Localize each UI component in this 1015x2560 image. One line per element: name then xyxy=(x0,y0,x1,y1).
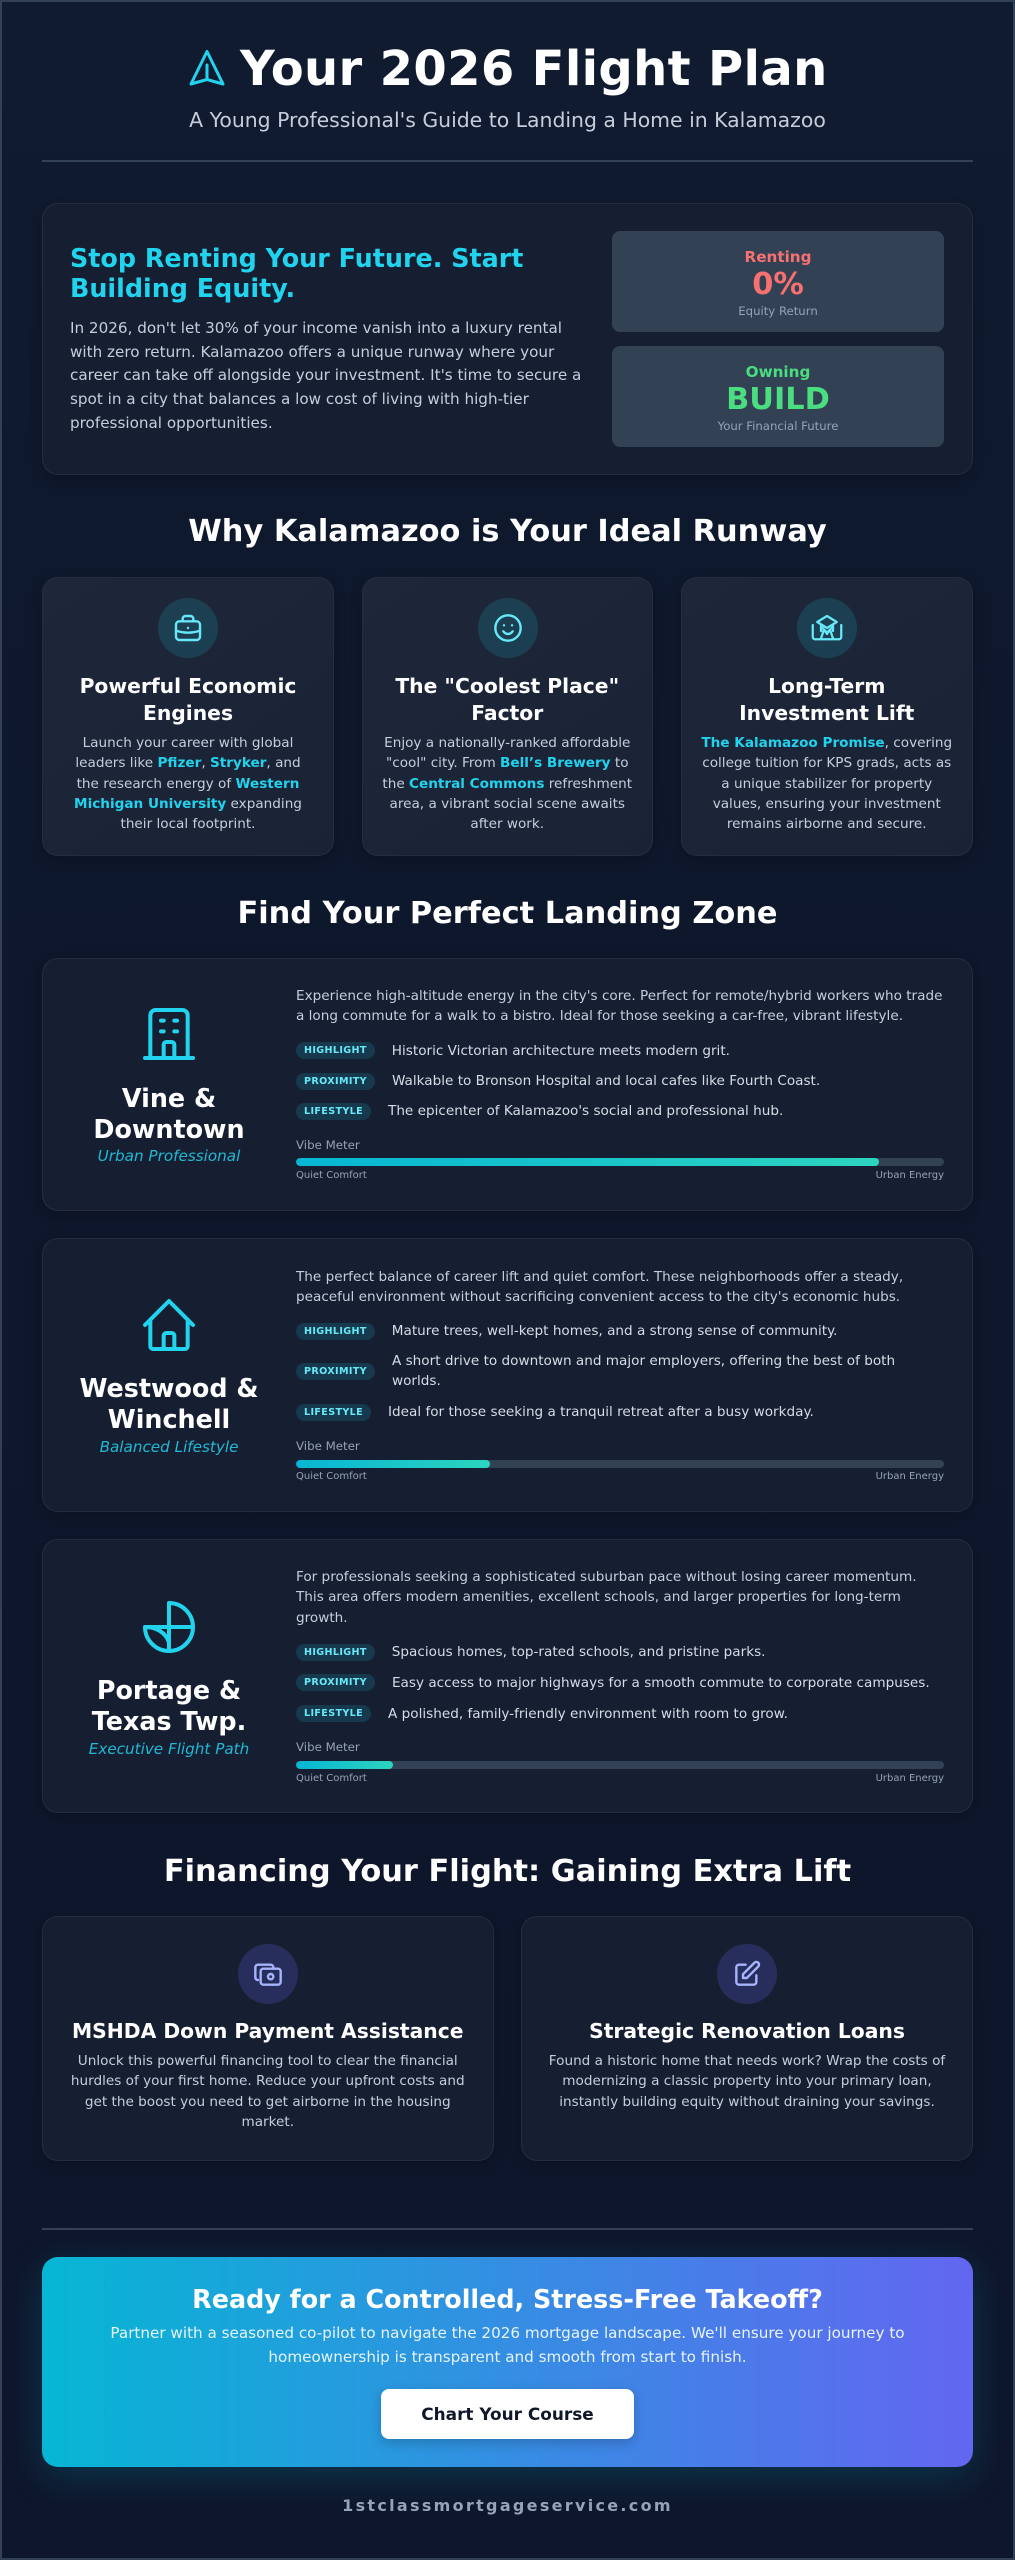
hero heading xyxy=(70,243,523,303)
highlight row: Spacious homes, top-rated schools, and pristine parks. xyxy=(392,1644,766,1660)
panel: portage and texas twp xyxy=(42,1539,973,1813)
stat: owning xyxy=(612,346,944,447)
vibe label: Vibe Meter xyxy=(296,1138,360,1152)
card text: a unique stabilizer for property xyxy=(721,776,932,792)
neighborhood name: Texas Twp. xyxy=(92,1706,246,1736)
hero paragraph xyxy=(70,319,581,432)
lifestyle row: The epicenter of Kalamazoo's social and professional hub. xyxy=(388,1103,783,1119)
card text: Enjoy a nationally-ranked affordable xyxy=(384,735,630,751)
scale labels: Urban Energy xyxy=(876,1170,944,1181)
description: Experience high-altitude energy in the city's core. Perfect for remote/hybrid workers who trade xyxy=(296,988,942,1004)
cta text: Partner with a seasoned co-pilot to navigate the 2026 mortgage landscape. We'll ensure your journey to xyxy=(110,2324,905,2342)
cta heading: Ready for a Controlled, Stress-Free Takeoff? xyxy=(192,2284,823,2314)
heading: financing: Financing Your Flight: Gaining Extra Lift xyxy=(164,1854,851,1889)
card title: Factor xyxy=(471,701,543,725)
heading: why kalamazoo: Why Kalamazoo is Your Ideal Runway xyxy=(188,514,827,549)
card title xyxy=(80,674,296,725)
neighborhood name xyxy=(79,1373,259,1434)
header xyxy=(189,41,828,132)
hero heading: Building Equity. xyxy=(70,273,295,303)
card text: Unlock this powerful financing tool to clear the financial xyxy=(78,2053,458,2069)
card title: Engines xyxy=(143,701,233,725)
card text: area, a vibrant social scene awaits xyxy=(389,796,625,812)
neighborhood name: Vine & xyxy=(122,1083,216,1113)
panel: coolest place xyxy=(362,577,653,856)
hero paragraph: In 2026, don't let 30% of your income vanish into a luxury rental xyxy=(70,319,562,337)
footer url: 1stclassmortgageservice.com xyxy=(342,2496,673,2515)
scale labels: Urban Energy xyxy=(876,1773,944,1784)
lifestyle row: LIFESTYLE xyxy=(304,1708,363,1719)
persona: Executive Flight Path xyxy=(89,1740,249,1758)
description: a long commute for a walk to a bistro. Ideal for those seeking a car-free, vibrant lifestyle. xyxy=(296,1008,903,1024)
card text: instantly building equity without draining your savings. xyxy=(559,2094,935,2110)
scale labels xyxy=(296,1773,944,1784)
card text: market. xyxy=(241,2114,294,2130)
neighborhood name xyxy=(92,1675,246,1736)
highlight row: HIGHLIGHT xyxy=(304,1045,367,1056)
vibe meter bar xyxy=(296,1158,944,1166)
scale labels xyxy=(296,1471,944,1482)
neighborhood name: Downtown xyxy=(93,1114,245,1144)
description xyxy=(296,1569,917,1626)
proximity row: A short drive to downtown and major employers, offering the best of both xyxy=(392,1353,895,1369)
icon: office building xyxy=(143,1008,195,1060)
card text: the Central Commons refreshment xyxy=(382,776,632,792)
cta text: homeownership is transparent and smooth from start to finish. xyxy=(268,2348,747,2366)
hero heading: Stop Renting Your Future. Start xyxy=(70,243,523,273)
card text: their local footprint. xyxy=(120,816,256,832)
proximity row: PROXIMITY xyxy=(304,1076,367,1087)
card text: "cool" city. From Bell’s Brewery to xyxy=(386,755,629,771)
stat: owning: BUILD xyxy=(726,382,830,417)
proximity row: PROXIMITY xyxy=(304,1366,367,1377)
panel: call to action xyxy=(42,2257,973,2467)
hero paragraph: spot in a city that balances a low cost of living with high-tier xyxy=(70,390,529,408)
description: For professionals seeking a sophisticated suburban pace without losing career momentum. xyxy=(296,1569,917,1585)
hero paragraph: career can take off alongside your investment. It's time to secure a xyxy=(70,366,581,384)
description: The perfect balance of career lift and quiet comfort. These neighborhoods offer a steady, xyxy=(296,1269,903,1285)
lifestyle row: LIFESTYLE xyxy=(304,1407,363,1418)
card text: college tuition for KPS grads, acts as xyxy=(702,755,951,771)
proximity row: PROXIMITY xyxy=(304,1677,367,1688)
subtitle: A Young Professional's Guide to Landing a Home in Kalamazoo xyxy=(189,108,826,132)
card title: Investment Lift xyxy=(739,701,914,725)
stat: renting: 0% xyxy=(752,267,804,302)
vibe label: Vibe Meter xyxy=(296,1740,360,1754)
card text: values, ensuring your investment xyxy=(713,796,941,812)
card title xyxy=(739,674,914,725)
card text xyxy=(71,2053,465,2130)
card text: the research energy of Western xyxy=(77,776,299,792)
highlight row: HIGHLIGHT xyxy=(304,1647,367,1658)
icon: academic home xyxy=(796,598,856,658)
proximity row: Easy access to major highways for a smooth commute to corporate campuses. xyxy=(392,1674,930,1690)
lifestyle row: A polished, family-friendly environment with room to grow. xyxy=(388,1706,788,1722)
panel: economic engines xyxy=(42,577,334,856)
panel: renovation loans xyxy=(521,1916,973,2161)
stat: renting: Renting xyxy=(745,248,811,266)
stat: renting xyxy=(612,231,944,332)
card text xyxy=(549,2053,946,2110)
icon: pencil square xyxy=(717,1944,777,2004)
neighborhood name xyxy=(93,1083,245,1144)
card text: Michigan University expanding xyxy=(74,796,302,812)
icon: smile xyxy=(478,598,538,658)
highlight row: HIGHLIGHT xyxy=(304,1326,367,1337)
icon: cash xyxy=(238,1944,298,2004)
cta button: Chart Your Course xyxy=(421,2404,594,2424)
neighborhood name: Portage & xyxy=(97,1675,241,1705)
description xyxy=(296,1269,903,1305)
stat: owning: Owning xyxy=(746,362,810,380)
card text xyxy=(382,735,632,832)
scale labels: Quiet Comfort xyxy=(296,1471,367,1482)
card title: Strategic Renovation Loans xyxy=(589,2019,905,2043)
panel: hero rent vs own xyxy=(42,203,973,475)
title: Your 2026 Flight Plan xyxy=(240,41,828,97)
description: growth. xyxy=(296,1610,348,1626)
card text: Launch your career with global xyxy=(83,735,293,751)
heading: landing zone: Find Your Perfect Landing Zone xyxy=(237,896,778,931)
vibe meter bar xyxy=(296,1460,944,1468)
scale labels xyxy=(296,1170,944,1181)
scale labels: Quiet Comfort xyxy=(296,1170,367,1181)
panel: investment lift xyxy=(680,577,973,856)
card text: modernizing a classic property into your primary loan, xyxy=(562,2073,932,2089)
cta button xyxy=(381,2389,634,2439)
icon: paper plane xyxy=(190,50,224,86)
card title: Long-Term xyxy=(768,674,885,698)
cta text xyxy=(110,2324,905,2366)
panel: mshda xyxy=(42,1916,494,2161)
lifestyle row: LIFESTYLE xyxy=(304,1106,363,1117)
neighborhood name: Winchell xyxy=(108,1404,230,1434)
card text: leaders like Pfizer, Stryker, and xyxy=(75,755,301,771)
card title: MSHDA Down Payment Assistance xyxy=(72,2019,464,2043)
panel: westwood and winchell xyxy=(42,1238,973,1512)
card title xyxy=(395,674,619,725)
icon: home xyxy=(142,1298,196,1351)
proximity row: worlds. xyxy=(392,1373,441,1389)
description xyxy=(296,988,942,1024)
proximity row xyxy=(296,1353,895,1389)
card text: get the boost you need to get airborne in the housing xyxy=(85,2094,451,2110)
card title: The "Coolest Place" xyxy=(395,674,619,698)
card text xyxy=(701,735,952,832)
icon: briefcase xyxy=(158,598,218,658)
neighborhood name: Westwood & xyxy=(79,1373,259,1403)
highlight row: Mature trees, well-kept homes, and a strong sense of community. xyxy=(392,1323,838,1339)
hero paragraph: with zero return. Kalamazoo offers a unique runway where your xyxy=(70,343,554,361)
vibe label: Vibe Meter xyxy=(296,1439,360,1453)
hero paragraph: professional opportunities. xyxy=(70,414,273,432)
vibe meter bar xyxy=(296,1760,944,1768)
stat: renting: Equity Return xyxy=(738,304,818,318)
description: This area offers modern amenities, excellent schools, and larger properties for long-term xyxy=(296,1589,901,1605)
card text: after work. xyxy=(470,816,544,832)
proximity row: Walkable to Bronson Hospital and local cafes like Fourth Coast. xyxy=(392,1073,820,1089)
card text: remains airborne and secure. xyxy=(727,816,927,832)
persona: Urban Professional xyxy=(98,1147,240,1165)
card text: The Kalamazoo Promise, covering xyxy=(701,735,952,751)
scale labels: Urban Energy xyxy=(876,1471,944,1482)
stat: owning: Your Financial Future xyxy=(718,419,838,433)
card title: Powerful Economic xyxy=(80,674,296,698)
scale labels: Quiet Comfort xyxy=(296,1773,367,1784)
card text: hurdles of your first home. Reduce your upfront costs and xyxy=(71,2073,465,2089)
description: peaceful environment without sacrificing convenient access to the city's economic hubs. xyxy=(296,1289,900,1305)
highlight row: Historic Victorian architecture meets modern grit. xyxy=(392,1042,730,1058)
persona: Balanced Lifestyle xyxy=(100,1438,238,1456)
icon: chart pie xyxy=(143,1601,195,1653)
card text: Found a historic home that needs work? Wrap the costs of xyxy=(549,2053,945,2069)
panel: vine and downtown xyxy=(42,958,973,1211)
card text xyxy=(74,735,302,832)
lifestyle row: Ideal for those seeking a tranquil retreat after a busy workday. xyxy=(388,1404,814,1420)
